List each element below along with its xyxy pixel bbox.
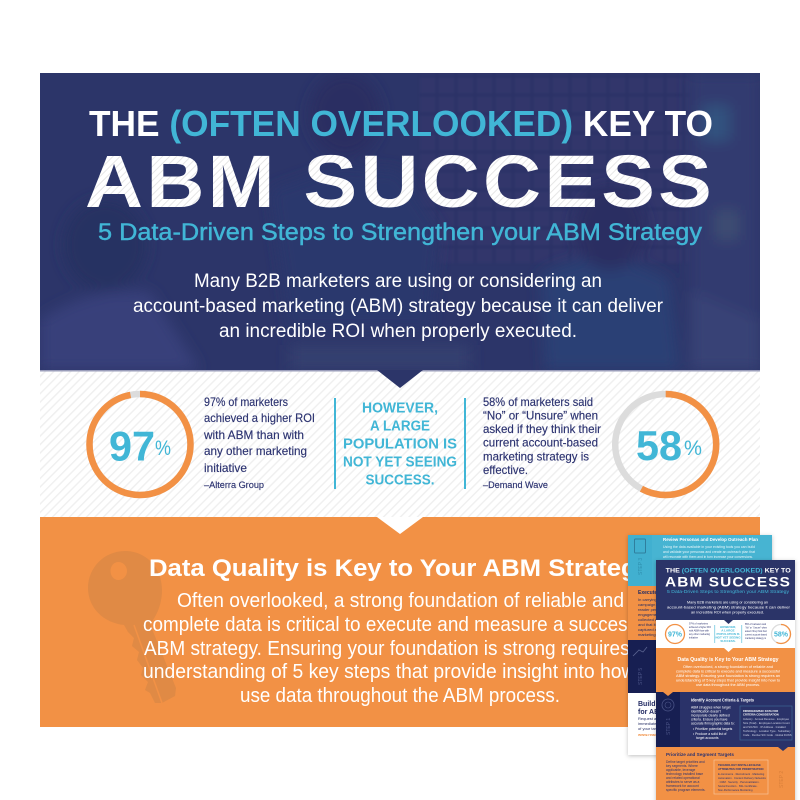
mini step 2: STEP 2 bbox=[779, 771, 785, 788]
mini step 1: STEP 1 bbox=[666, 718, 672, 735]
mini data quality: ABM strategy. Ensuring your foundation is strong requires an bbox=[676, 673, 780, 678]
mini step 1: Size (Total) · Employee Location Count bbox=[743, 721, 790, 725]
mockup: back page bbox=[628, 535, 772, 755]
mini stats: 97% bbox=[668, 632, 683, 638]
mini hero bbox=[656, 560, 795, 620]
step 4 band: In carrying bbox=[638, 597, 657, 602]
mini stats bbox=[664, 620, 792, 644]
intro paragraph: account-based marketing (ABM) strategy because it can deliver bbox=[133, 296, 664, 317]
mini step 1: and SIC/SIC · IP Address · Installed bbox=[743, 725, 786, 729]
mini step 2 bbox=[656, 747, 795, 800]
step 3 band: STEP 3 bbox=[638, 558, 644, 575]
mini hero: THE (OFTEN OVERLOOKED) KEY TO bbox=[666, 568, 791, 575]
mini step 2: · CRM · Security · Personalization · bbox=[718, 780, 760, 784]
mini step 2: Automation · Content Delivery Networks bbox=[718, 776, 766, 780]
mini data quality: understanding of 5 key steps that provide insight into how to bbox=[676, 678, 780, 682]
call to action: Build bbox=[638, 701, 656, 708]
mini step 1: FIRMOGRAPHIC DATA FOR bbox=[743, 709, 778, 713]
call to action bbox=[638, 700, 656, 736]
callout: however: NOT YET SEEING bbox=[343, 454, 457, 470]
callout: however bbox=[343, 400, 457, 488]
body paragraph: understanding of 5 key steps that provide insight into how to bbox=[143, 661, 657, 683]
mini data quality: Data Quality is Key to Your ABM Strategy bbox=[678, 657, 779, 663]
step 5 band: STEP 5 bbox=[638, 668, 644, 685]
call to action: for ABM bbox=[638, 709, 665, 716]
mini stats: achieved a higher ROI bbox=[689, 626, 711, 629]
mini stats: 58% bbox=[774, 632, 789, 638]
mini stats: with ABM than with bbox=[689, 630, 710, 632]
title line two: ABM SUCCESS bbox=[85, 140, 715, 223]
title line one: THE (OFTEN OVERLOOKED) KEY TO bbox=[89, 103, 713, 144]
step 4 band: collected a bbox=[638, 617, 658, 622]
stat: 58 percent ring: % bbox=[684, 437, 702, 460]
mini step 1: Industry · Annual Revenue · Employee bbox=[743, 717, 790, 721]
stat text: 97 percent: initiative bbox=[204, 461, 247, 475]
mini step 2: Define target priorities and bbox=[666, 760, 705, 764]
mini step 2: key segments. Where bbox=[666, 764, 698, 768]
step 3 band bbox=[628, 535, 772, 586]
mini step 2: TECHNOLOGY INSTALLED BASE bbox=[718, 763, 761, 767]
step 3 band: Using the data available in your existing tools you can build bbox=[663, 545, 755, 549]
mini stats: “No” or “Unsure” when bbox=[745, 626, 768, 630]
heading: Data Quality is Key to Your ABM Strategy bbox=[149, 555, 652, 582]
mini step 1: Code · Dunbar SIC Code · Global DUNS bbox=[743, 733, 792, 737]
callout: however: HOWEVER, bbox=[362, 400, 438, 416]
mini step 2: ATTRIBUTES FOR PRIORITIZATION bbox=[718, 767, 763, 771]
callout: however: A LARGE bbox=[370, 418, 430, 434]
stat text: 97 percent: any other marketing bbox=[204, 444, 307, 458]
mini step 2: technology installed base bbox=[666, 772, 703, 776]
stat text: 58 percent: current account-based bbox=[483, 436, 598, 450]
panel: data quality bbox=[40, 517, 760, 727]
mini stats: HOWEVER, bbox=[720, 625, 736, 629]
step 4 band: campaign d bbox=[638, 602, 659, 607]
stat text: 97 percent: –Alterra Group bbox=[204, 480, 264, 490]
stat text: 58 percent: 58% of marketers said bbox=[483, 395, 593, 409]
intro paragraph: an incredible ROI when properly executed. bbox=[219, 321, 577, 342]
panel: statistics band bbox=[40, 370, 760, 517]
mini stats: SUCCESS. bbox=[720, 639, 736, 643]
body paragraph: use data throughout the ABM process. bbox=[240, 685, 560, 707]
stat text: 58 percent: effective. bbox=[483, 463, 528, 477]
body paragraph: complete data is critical to execute and measure a successful bbox=[143, 614, 657, 636]
mockup: front page bbox=[656, 560, 795, 800]
mini data quality: Often overlooked, a strong foundation of reliable and bbox=[683, 664, 773, 669]
mini step 2: Non-Performance Monitoring bbox=[718, 788, 753, 792]
step 4 band: engagemen bbox=[638, 612, 659, 617]
step 5 band bbox=[628, 640, 656, 693]
mini stats: POPULATION IS bbox=[716, 632, 740, 636]
mini step 2: E-commerce · Recruitment · Marketing bbox=[718, 772, 765, 776]
mini step 2: Prioritize and Segment Targets bbox=[666, 752, 735, 757]
stat text: 97 percent: with ABM than with bbox=[203, 428, 304, 442]
mini step 2: specific program elements. bbox=[666, 788, 705, 792]
stat: 58 percent ring: 58 bbox=[636, 422, 682, 469]
step 4 band: marketing t bbox=[638, 632, 659, 637]
mini stats: asked if they think their bbox=[745, 630, 767, 633]
body paragraph bbox=[143, 590, 657, 707]
stat: 97 percent ring: % bbox=[155, 437, 171, 460]
mini step 1: • Produce a solid list of bbox=[693, 732, 726, 736]
step 3 band: will resonate with them and in turn increase your conversions. bbox=[663, 555, 753, 559]
mini step 1: identification doesn't bbox=[691, 710, 721, 714]
intro paragraph: Many B2B marketers are using or considering an bbox=[194, 271, 602, 292]
stat text: 97 percent: 97% of marketers bbox=[204, 395, 288, 409]
mini data quality: use data throughout the ABM process. bbox=[696, 682, 760, 687]
mini step 2: Social Function · SSL Certificate · bbox=[718, 784, 758, 788]
step 4 band bbox=[628, 586, 656, 640]
mini step 1: target accounts bbox=[696, 736, 719, 740]
mini hero: ABM SUCCESS bbox=[665, 574, 791, 590]
call to action: of your tar bbox=[638, 726, 657, 731]
mini step 1: Technology · Location Type · Subsidiary bbox=[743, 729, 791, 733]
stat: 97 percent ring: 97 bbox=[109, 422, 155, 470]
mini hero: account-based marketing (ABM) strategy because it can deliver bbox=[667, 606, 791, 610]
step 3 band: Review Personas and Develop Outreach Plan bbox=[663, 537, 758, 542]
panel: hero header bbox=[40, 73, 760, 370]
subtitle: 5 Data-Driven Steps to Strengthen your ABM Strategy bbox=[98, 219, 702, 246]
step 4 band: captured a bbox=[638, 627, 658, 632]
mini hero: an incredible ROI when properly executed. bbox=[691, 610, 764, 614]
call to action: www.read bbox=[637, 732, 657, 737]
step 4 band: Execute bbox=[638, 590, 657, 596]
intro paragraph bbox=[133, 271, 664, 342]
mini stats: any other marketing bbox=[689, 633, 711, 636]
hero photo background bbox=[40, 73, 760, 370]
mini stats: NOT YET SEEING bbox=[715, 636, 741, 640]
stat: 58 percent ring bbox=[615, 394, 716, 495]
mini stats: marketing strategy is bbox=[745, 637, 767, 640]
divider left bbox=[334, 398, 336, 489]
divider right bbox=[464, 398, 466, 489]
call to action: immediate bbox=[638, 721, 657, 726]
body paragraph: ABM strategy. Ensuring your foundation is strong requires an bbox=[144, 638, 656, 660]
mini hero: Many B2B marketers are using or considering an bbox=[687, 600, 768, 604]
mini step 1: ABM struggles when target bbox=[691, 706, 731, 710]
mini step 2: framework for account bbox=[666, 784, 699, 788]
callout: however: SUCCESS. bbox=[366, 472, 434, 488]
mini step 1 bbox=[656, 692, 795, 747]
mini data quality bbox=[656, 648, 795, 692]
mini step 2: applicable, leverage bbox=[666, 768, 695, 772]
mini step 1: incorporate clearly defined bbox=[691, 714, 730, 718]
mini step 2: and related operational bbox=[666, 776, 700, 780]
mini stats: current account-based bbox=[745, 634, 768, 636]
stat text: 58 percent: marketing strategy is bbox=[483, 450, 589, 464]
stat text: 97 percent bbox=[203, 395, 315, 490]
icon: key bbox=[88, 551, 176, 703]
stat text: 58 percent: “No” or “Unsure” when bbox=[483, 408, 598, 422]
mini step 1: CRITERIA CONSIDERATION bbox=[743, 712, 779, 716]
mini step 2: attributes to serve as a bbox=[666, 780, 700, 784]
mini step 1: Identify Account Criteria & Targets bbox=[691, 698, 754, 703]
step 3 band: and validate your personas and create an outreach plan that bbox=[663, 550, 756, 554]
stat text: 58 percent bbox=[483, 395, 601, 490]
hero pointer bbox=[377, 370, 423, 388]
mini data quality: complete data is critical to execute and measure a successful bbox=[676, 668, 780, 674]
stat text: 58 percent: –Demand Wave bbox=[483, 480, 548, 490]
mini hero: 5 Data-Driven Steps to Strengthen your ABM Strategy bbox=[667, 589, 790, 594]
call to action: Request a bbox=[638, 716, 657, 721]
stat: 97 percent ring bbox=[90, 394, 190, 495]
stat text: 97 percent: achieved a higher ROI bbox=[204, 411, 315, 425]
mini stats: 97% of marketers bbox=[689, 622, 709, 626]
mini stats: initiative bbox=[689, 636, 699, 640]
mini step 1: accurate firmographic data to: bbox=[691, 722, 735, 726]
body paragraph: Often overlooked, a strong foundation of reliable and bbox=[177, 590, 624, 612]
mini stats: A LARGE bbox=[721, 628, 735, 632]
step 4 band: reader pers bbox=[638, 607, 658, 612]
mini step 1: • Prioritize potential targets bbox=[693, 727, 733, 731]
step 4 band: and that it i bbox=[638, 622, 658, 627]
stat text: 58 percent: asked if they think their bbox=[483, 422, 601, 436]
mini step 1: criteria. Ensure you have bbox=[691, 718, 728, 722]
callout: however: POPULATION IS bbox=[343, 436, 457, 452]
mini stats: 58% of marketers said bbox=[745, 623, 767, 626]
